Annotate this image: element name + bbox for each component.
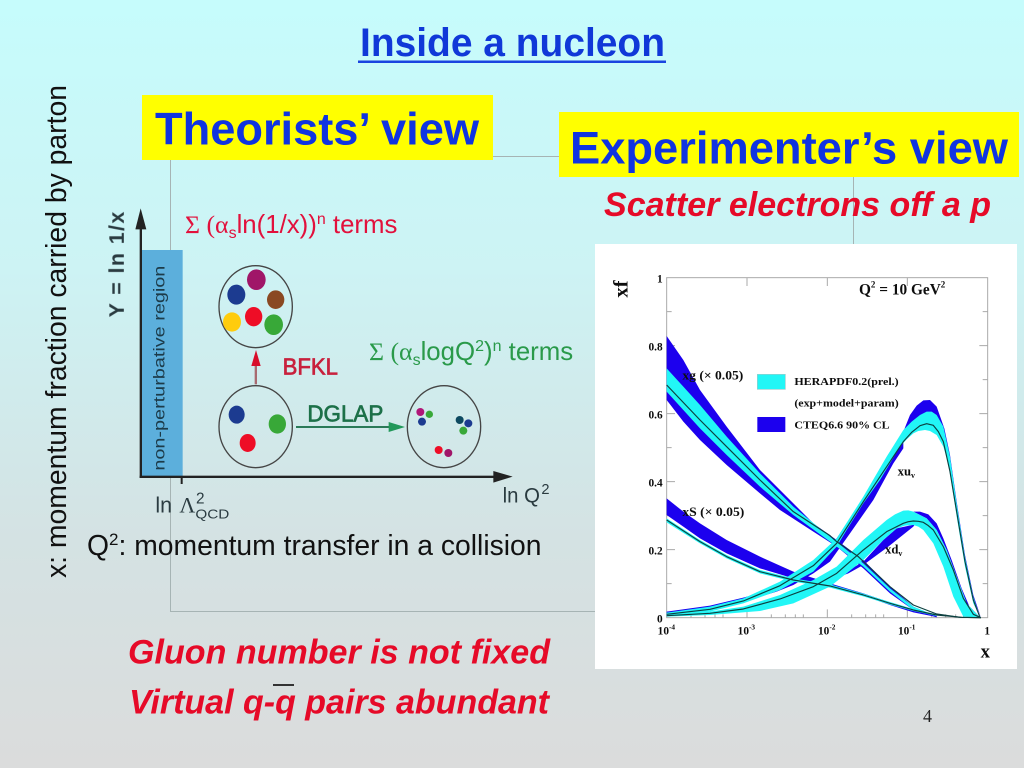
Q2 annotation: Q — [859, 281, 871, 298]
axis titles — [611, 279, 991, 663]
chart labels: xu — [898, 464, 911, 478]
plot frame and ticks — [667, 278, 988, 618]
Q2 definition: : momentum transfer in a collision — [118, 529, 542, 561]
arrow: DGLAP: DGLAP — [307, 400, 383, 426]
y axis label: Y = ln 1/x — [105, 212, 129, 317]
x axis tick label: 2 — [196, 490, 205, 507]
x axis ticks: -4 — [669, 623, 675, 632]
rotated axis label: x momentum fraction: x: momentum fraction carried by parton — [40, 85, 72, 578]
label: DGLAP terms: n — [493, 338, 501, 355]
legend: (exp+model+param) — [794, 397, 899, 409]
cyan band: xu valence — [667, 412, 980, 617]
legend: CTEQ6.6 90% CL — [794, 419, 890, 431]
Q2 annotation: 2 — [871, 280, 876, 290]
x axis ticks: -2 — [829, 623, 836, 632]
axis titles: xf — [611, 279, 633, 298]
x axis tick label: QCD — [195, 507, 229, 522]
x axis tick label: ln — [155, 493, 172, 518]
legend: HERAPDF0.2(prel.) — [794, 376, 899, 388]
x axis ticks: -3 — [749, 623, 755, 632]
chart labels: xS (× 0.05) — [682, 505, 744, 519]
y axis ticks: 0.2 — [648, 545, 663, 557]
chart: parton distribution functions — [595, 244, 1017, 669]
circle: many partons — [219, 266, 292, 348]
x axis label: 2 — [541, 482, 549, 498]
diagram: BFKL and DGLAP evolution — [105, 208, 549, 522]
page number: 4 — [923, 706, 932, 726]
x axis tick label: Λ — [179, 493, 195, 518]
Q2 definition: Q — [87, 529, 109, 561]
non-perturbative region: non-perturbative region — [151, 266, 168, 471]
label: BFKL terms: n — [317, 211, 326, 228]
x axis ticks: 1 — [984, 625, 990, 637]
label: BFKL terms: ln(1/x)) — [237, 211, 317, 239]
cyan band: xd valence — [667, 510, 980, 617]
subheading: scatter electrons: Scatter electrons off a p — [604, 186, 991, 224]
chart labels — [682, 369, 915, 558]
legend — [757, 374, 899, 432]
conclusion: gluon number: Gluon number is not fixed — [128, 634, 551, 672]
blue bands: valence quarks — [667, 400, 981, 618]
arrow: DGLAP — [296, 400, 405, 432]
y axis ticks: 1 — [657, 274, 663, 286]
axis titles: x — [981, 642, 991, 663]
title: Inside a nucleon — [360, 21, 665, 65]
y axis ticks: 0.6 — [648, 409, 663, 421]
chart labels: xg (× 0.05) — [682, 369, 743, 383]
x axis ticks: -1 — [909, 623, 916, 632]
non-perturbative region — [142, 250, 183, 477]
thin frame — [170, 156, 854, 612]
x axis ticks: 10 — [658, 625, 669, 637]
x axis ticks: 10 — [898, 625, 909, 637]
label: BFKL terms: Σ (α — [185, 210, 229, 239]
chart labels: v — [911, 471, 915, 480]
label: DGLAP terms: 2 — [475, 338, 484, 355]
label: DGLAP terms: ) — [484, 338, 493, 366]
y axis ticks: 0.8 — [648, 341, 663, 353]
y axis ticks: 0 — [657, 613, 663, 625]
y axis ticks — [648, 274, 663, 625]
chart labels: xd — [885, 542, 898, 556]
x axis ticks: 10 — [818, 625, 829, 637]
cyan band: xg — [667, 368, 937, 616]
chart labels: v — [898, 549, 902, 558]
Q2 annotation: 2 — [941, 280, 946, 290]
label: DGLAP terms: Σ (α — [369, 337, 413, 366]
arrow: BFKL — [251, 350, 338, 384]
y axis ticks: 0.4 — [648, 477, 663, 489]
label: DGLAP terms: logQ — [421, 338, 475, 366]
x axis label: ln Q — [503, 484, 540, 508]
heading: Experimenter's view: Experimenter’s view — [570, 122, 1009, 174]
x axis tick label — [155, 490, 229, 522]
label: BFKL terms: s — [229, 225, 237, 242]
circle: three partons — [219, 386, 292, 468]
label: DGLAP terms: s — [413, 352, 421, 369]
axes — [135, 208, 513, 484]
label: DGLAP terms: terms — [501, 338, 573, 366]
Q2 definition: 2 — [109, 530, 118, 549]
Q2 annotation: = 10 GeV — [875, 281, 941, 298]
blue band: xS — [667, 498, 937, 617]
cyan band: xS — [667, 518, 937, 616]
label: BFKL terms: terms — [326, 211, 397, 239]
heading: Theorists' view: Theorists’ view — [155, 104, 480, 154]
x axis ticks — [658, 623, 990, 637]
central curves — [667, 385, 981, 618]
blue band: xg — [667, 336, 937, 617]
circle: split partons — [407, 386, 481, 468]
x axis ticks: 10 — [738, 625, 749, 637]
conclusion: virtual pairs: Virtual q-q pairs abundant — [129, 684, 551, 722]
arrow: BFKL: BFKL — [283, 353, 338, 379]
